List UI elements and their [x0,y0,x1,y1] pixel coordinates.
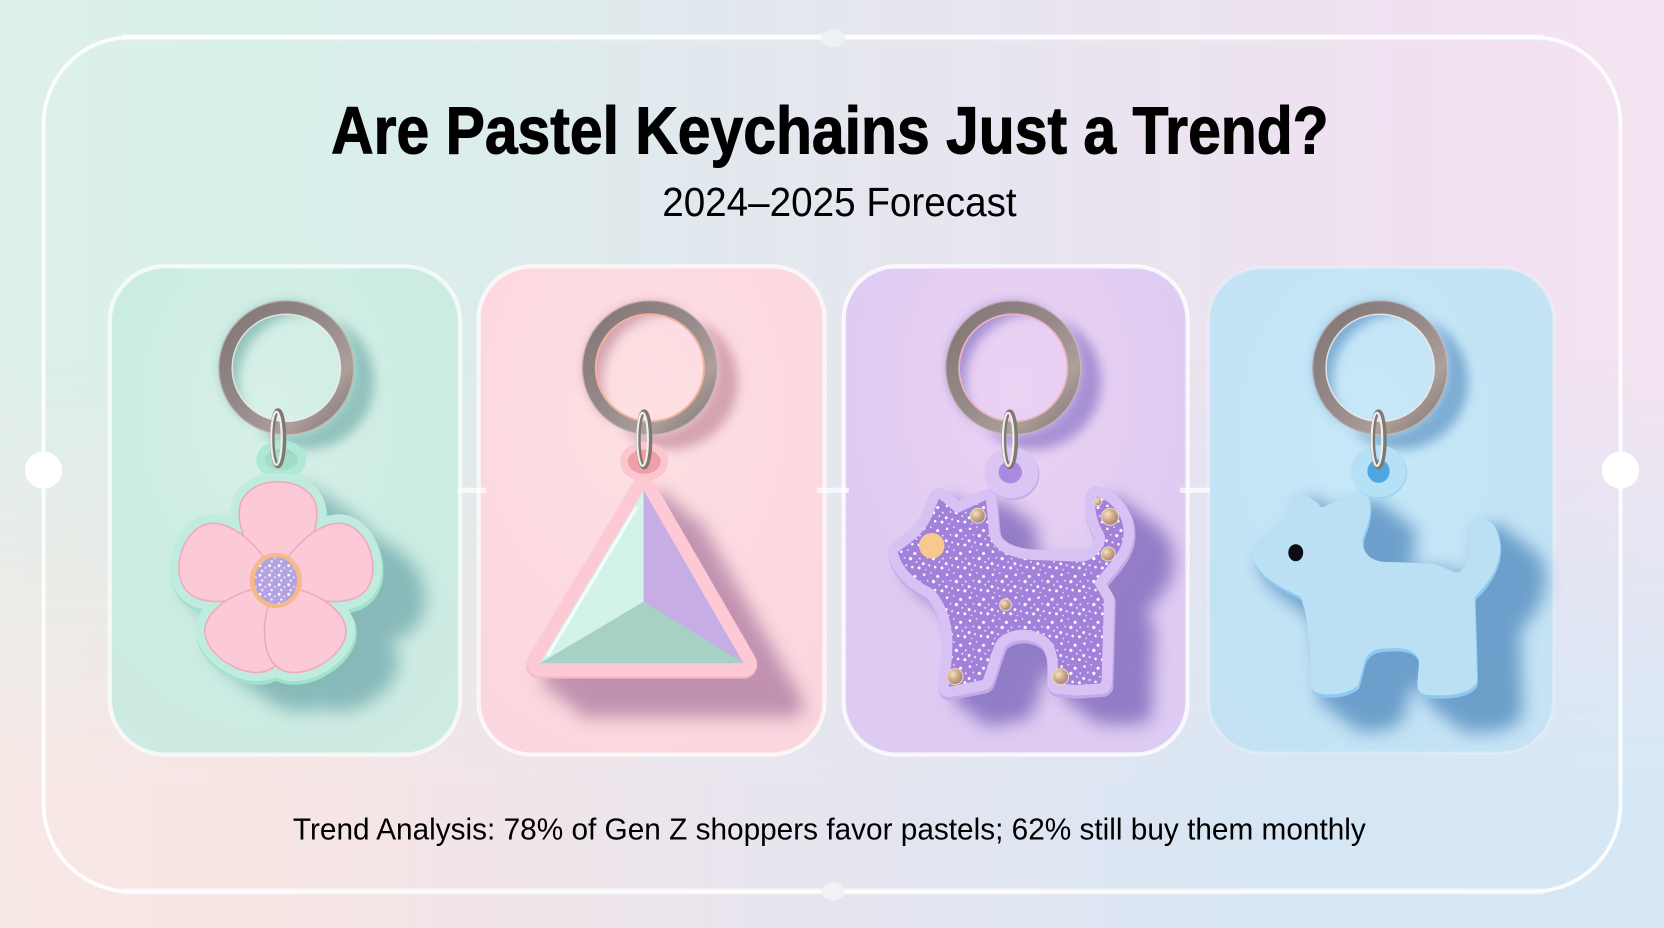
icon: key ring [583,301,717,435]
icon: jump ring [637,412,650,467]
panel: pink triangle keychain [479,266,825,755]
panel: blue cat keychain [1209,268,1554,753]
shadow: glitter cat [913,302,1164,716]
icon: blue cat charm [1252,494,1501,699]
icon: blue loop tag [1351,445,1407,499]
panel: lilac glitter cat keychain [844,266,1188,755]
icon: mint loop tag [261,445,302,474]
icon: key ring [219,301,354,435]
icon: lilac loop tag [984,447,1039,500]
shadow: flower keychain [185,302,426,717]
icon: jump ring [1003,412,1016,467]
shadow: blue cat [1264,302,1541,727]
icon: pink loop tag [624,446,664,478]
caption: trend analysis: Trend Analysis: 78% of Gen Z shoppers favor pastels; 62% still buy them monthly [293,811,1366,846]
subtitle: 2024–2025 Forecast [662,179,1017,225]
icon: triangle charm [540,490,743,665]
panel: mint flower keychain [110,266,460,755]
icon: key ring [1313,301,1448,435]
icon: jump ring [271,411,284,466]
icon: jump ring [1372,412,1384,467]
shadow: triangle keychain [555,302,791,705]
icon: key ring [946,301,1081,435]
title: Are Pastel Keychains Just a Trend? [331,93,1329,168]
icon: flower charm [170,482,383,688]
connectors between cards [457,488,1210,493]
icon: glitter cat charm [898,497,1125,689]
